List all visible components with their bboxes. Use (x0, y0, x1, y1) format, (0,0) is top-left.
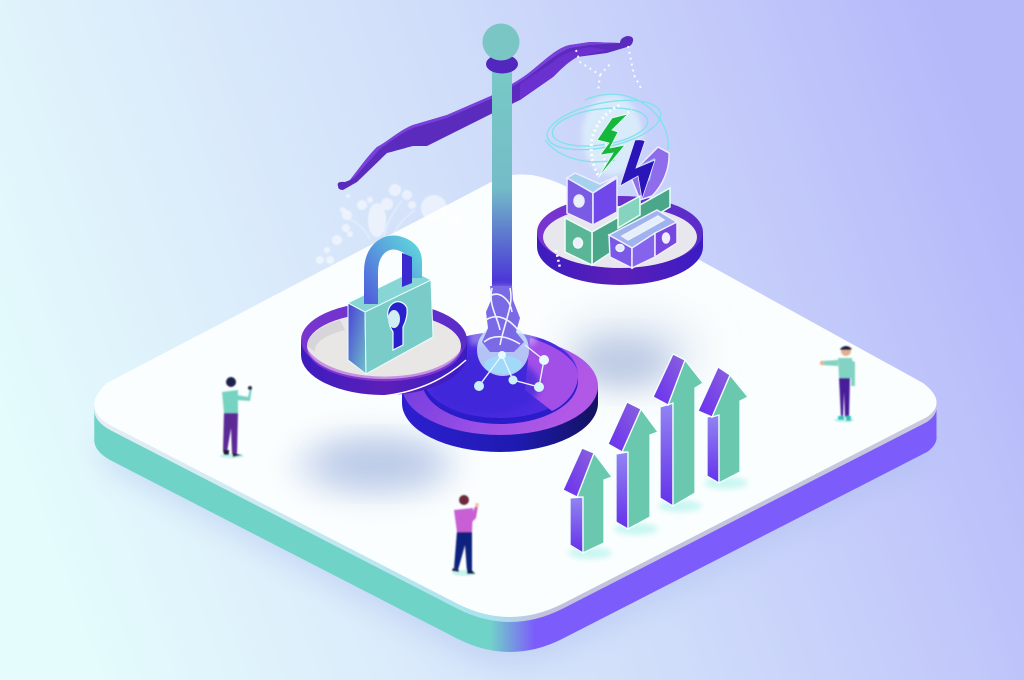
arrow glow (568, 477, 748, 559)
person: right gesturing (820, 346, 855, 422)
person: left with phone (220, 377, 252, 458)
energy swirl (543, 91, 668, 175)
green bolt (597, 114, 628, 178)
growth arrow 2 (608, 402, 658, 529)
shadow: scale on platform (290, 318, 700, 501)
twisted rope and glass globe (465, 286, 545, 376)
right pan with blocks and bolts (537, 91, 703, 285)
purple block (567, 173, 617, 225)
collar (486, 54, 518, 74)
person: front in pink shirt (452, 495, 479, 576)
small purple block (609, 210, 677, 268)
growth arrow 1 (563, 448, 612, 553)
padlock (348, 242, 433, 374)
navy bolt (620, 140, 655, 199)
platform (94, 174, 937, 665)
growth arrow 4 (698, 367, 748, 483)
growth arrow 3 (653, 354, 703, 506)
network nodes (474, 345, 549, 392)
left pan with padlock (301, 242, 467, 398)
green block (565, 188, 670, 265)
keyhole (388, 302, 407, 350)
ball (482, 24, 520, 60)
chain dots: right (576, 46, 642, 92)
pan (537, 196, 703, 285)
shackle (371, 242, 415, 304)
post (482, 24, 520, 286)
balance beam (338, 36, 633, 190)
base (402, 332, 598, 452)
pan (301, 302, 467, 398)
shield disc (630, 147, 669, 200)
white flourish (316, 184, 462, 264)
